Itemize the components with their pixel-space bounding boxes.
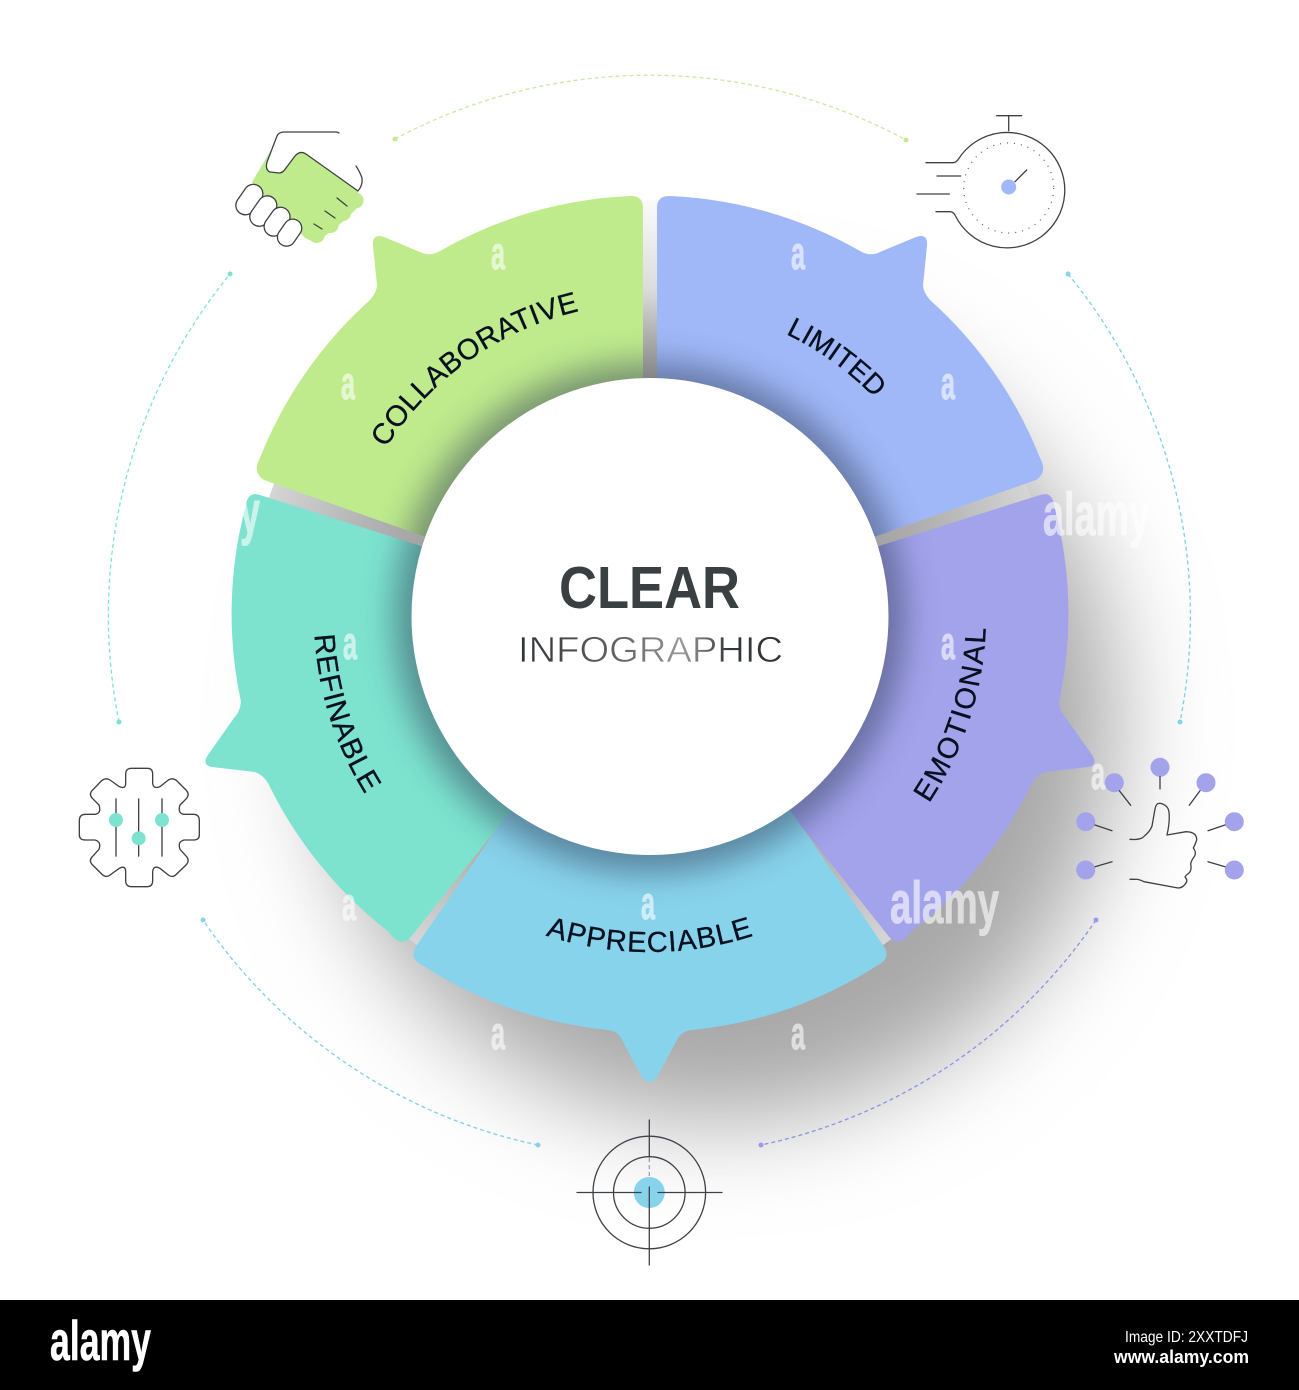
icon: target bbox=[577, 1120, 722, 1265]
dashed arc: left bbox=[108, 272, 232, 724]
soft drop shadow bbox=[320, 324, 1116, 1120]
watermarks: a bbox=[941, 357, 955, 409]
label: appreciable: APPRECIABLE bbox=[545, 917, 752, 952]
inner shadow of centre circle bbox=[394, 362, 906, 874]
watermarks: a bbox=[1091, 747, 1105, 799]
panel: collaborative bbox=[257, 196, 643, 570]
icon: gear with sliders bbox=[79, 768, 199, 887]
dashed arc: bottom left bbox=[200, 918, 540, 1148]
watermarks: a bbox=[941, 617, 955, 669]
centre circle bbox=[412, 378, 888, 855]
watermarks: alamy bbox=[890, 870, 999, 936]
dashed arc: top bbox=[392, 75, 908, 142]
label: limited: LIMITED bbox=[788, 318, 884, 394]
panel: appreciable bbox=[413, 737, 887, 1082]
watermarks: a bbox=[491, 1007, 505, 1059]
watermarks: a bbox=[341, 357, 355, 409]
dashed arc: bottom right bbox=[758, 918, 1098, 1148]
watermarks: y bbox=[240, 479, 260, 546]
label: refinable: REFINABLE bbox=[314, 635, 382, 794]
watermarks: a bbox=[791, 227, 805, 279]
segment gaps bbox=[250, 200, 1050, 1020]
watermarks: a bbox=[342, 878, 356, 930]
watermarks: alamy bbox=[1043, 481, 1150, 548]
watermarks: a bbox=[491, 227, 505, 279]
watermarks: a bbox=[791, 1007, 805, 1059]
panel: limited bbox=[657, 196, 1043, 570]
icon: thumbs up bbox=[1076, 758, 1244, 888]
image id: Image ID: 2XXTDFJ bbox=[1125, 1329, 1248, 1346]
footer bar bbox=[0, 1300, 1299, 1390]
label: collaborative: COLLABORATIVE bbox=[373, 292, 578, 444]
subtitle: INFOGRAPHIC bbox=[518, 629, 783, 670]
panel: emotional bbox=[720, 494, 1095, 942]
title: CLEAR bbox=[559, 555, 740, 621]
icon: handshake bbox=[232, 132, 364, 250]
website: www.alamy.com bbox=[1113, 1347, 1249, 1367]
watermarks: a bbox=[343, 617, 357, 669]
footer logo: alamy bbox=[50, 1309, 151, 1372]
watermarks: a bbox=[641, 877, 655, 929]
dashed arc: right bbox=[1066, 272, 1190, 724]
panel: refinable bbox=[205, 494, 580, 942]
label: emotional: EMOTIONAL bbox=[913, 628, 986, 802]
icon: stopwatch bbox=[917, 116, 1065, 248]
watermarks bbox=[240, 227, 1150, 1059]
